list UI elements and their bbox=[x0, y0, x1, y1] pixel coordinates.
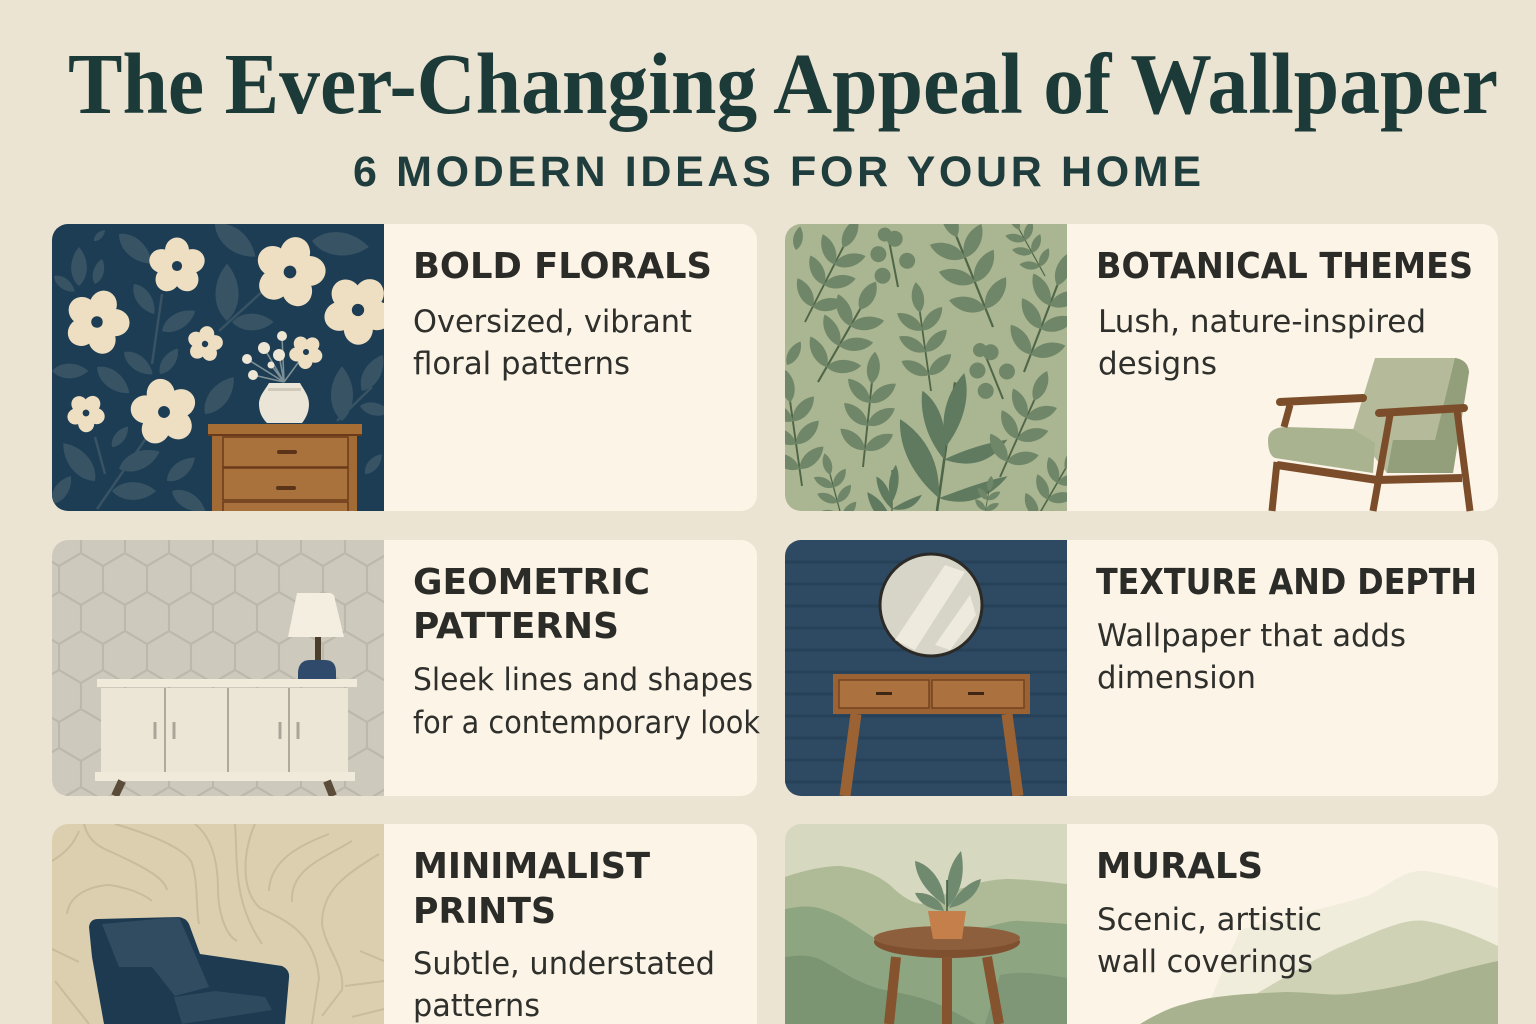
heading: PRINTS bbox=[413, 891, 556, 932]
card background bbox=[52, 224, 757, 511]
panel: murals bbox=[785, 824, 1498, 1024]
description: floral patterns bbox=[413, 346, 630, 382]
card background bbox=[52, 540, 757, 796]
heading: GEOMETRIC bbox=[413, 562, 650, 603]
description: for a contemporary look bbox=[413, 705, 760, 741]
icon: green armchair bbox=[1268, 358, 1470, 511]
illustration: beige wallpaper with navy armchair bbox=[52, 824, 384, 1024]
heading: BOLD FLORALS bbox=[413, 246, 712, 287]
description bbox=[413, 946, 715, 1024]
heading: BOTANICAL THEMES bbox=[1096, 246, 1473, 287]
description: Sleek lines and shapes bbox=[413, 662, 753, 698]
illustration: misty hills continuing across the card bbox=[1140, 871, 1498, 1024]
description bbox=[413, 662, 760, 741]
heading: MINIMALIST bbox=[413, 846, 650, 887]
heading: PATTERNS bbox=[413, 606, 619, 647]
illustration: botanical leaf wallpaper bbox=[785, 224, 1067, 511]
heading bbox=[413, 562, 650, 647]
subtitle: 6 MODERN IDEAS FOR YOUR HOME bbox=[353, 148, 1201, 196]
panel: botanical themes bbox=[785, 224, 1498, 512]
description bbox=[413, 304, 692, 382]
description bbox=[1098, 304, 1426, 382]
description: Lush, nature-inspired bbox=[1098, 304, 1426, 340]
illustration: hexagon wallpaper with sideboard and lamp bbox=[52, 540, 384, 796]
description: designs bbox=[1098, 346, 1217, 382]
heading bbox=[413, 846, 650, 932]
description: Scenic, artistic bbox=[1097, 902, 1322, 938]
card background bbox=[785, 824, 1498, 1024]
illustration: textured navy wall with mirror and console bbox=[785, 540, 1067, 796]
description: wall coverings bbox=[1097, 944, 1313, 980]
illustration: misty mountain mural with plant table bbox=[785, 824, 1067, 1024]
description: Oversized, vibrant bbox=[413, 304, 692, 340]
description: Wallpaper that adds bbox=[1097, 618, 1406, 654]
panel: texture and depth bbox=[785, 540, 1498, 796]
card background bbox=[52, 824, 757, 1024]
panel: bold florals bbox=[46, 216, 757, 518]
panel: minimalist prints bbox=[52, 824, 757, 1024]
description bbox=[1097, 618, 1406, 696]
card background bbox=[785, 224, 1498, 511]
description bbox=[1097, 902, 1322, 980]
illustration: floral wallpaper with dresser and vase bbox=[52, 224, 384, 511]
heading: TEXTURE AND DEPTH bbox=[1096, 562, 1477, 603]
description: patterns bbox=[413, 988, 540, 1024]
panel: geometric patterns bbox=[52, 540, 760, 796]
description: Subtle, understated bbox=[413, 946, 715, 982]
heading: MURALS bbox=[1096, 846, 1263, 887]
description: dimension bbox=[1097, 660, 1256, 696]
card background bbox=[785, 540, 1498, 796]
